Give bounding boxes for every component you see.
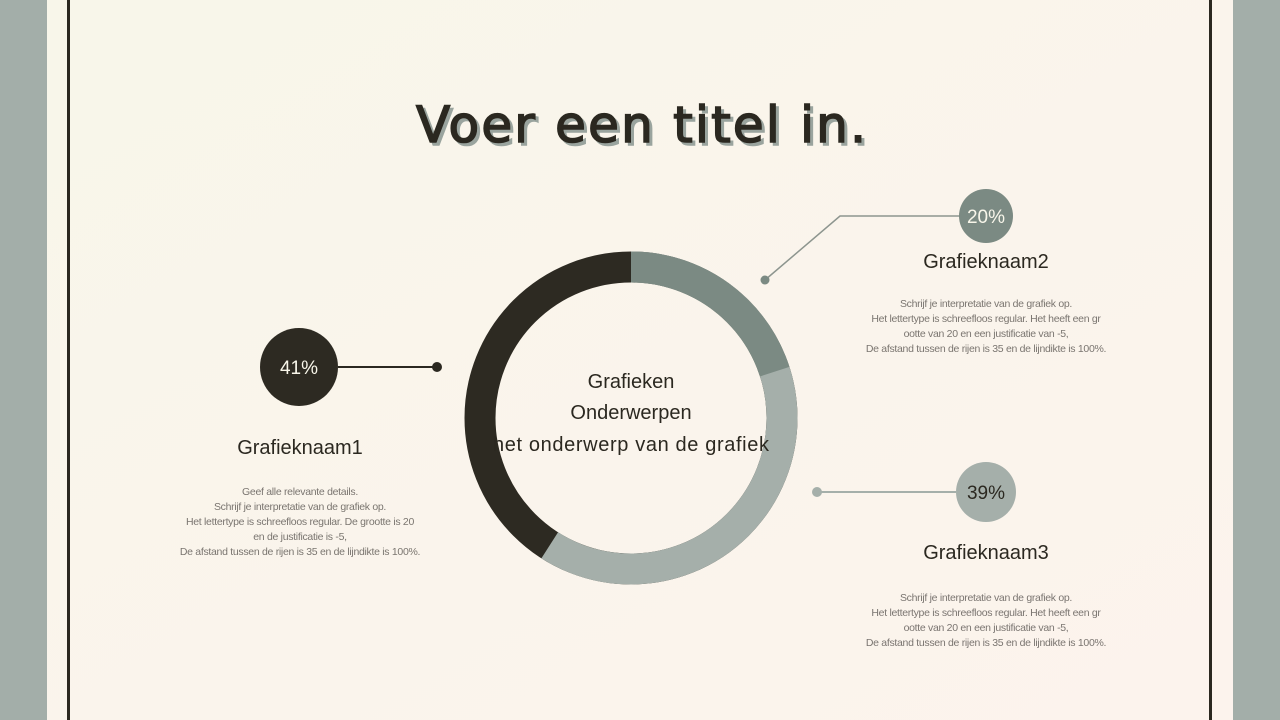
donut chart [480,267,782,569]
center text: het onderwerp van de grafiek [493,434,770,456]
callout 1: Het lettertype is schreefloos regular. De grootte is 20 [186,516,414,528]
callout 2: Grafieknaam2 [923,251,1049,273]
center text: Grafieken [588,371,674,393]
callout 3: De afstand tussen de rijen is 35 en de lijndikte is 100%. [866,637,1106,649]
callout 3: Grafieknaam3 [923,542,1049,564]
callout 2: Het lettertype is schreefloos regular. Het heeft een gr [871,313,1101,325]
callout 1: Grafieknaam1 [237,437,363,459]
callout 1: Schrijf je interpretatie van de grafiek op. [214,501,386,513]
callout 2 [760,189,1106,355]
callout 3: Schrijf je interpretatie van de grafiek op. [900,592,1072,604]
callout 2: Schrijf je interpretatie van de grafiek op. [900,298,1072,310]
center text: Onderwerpen [570,402,692,424]
callout 2: De afstand tussen de rijen is 35 en de lijndikte is 100%. [866,343,1106,355]
callout 3: ootte van 20 en een justificatie van -5, [904,622,1068,634]
callout 1: en de justificatie is -5, [253,531,347,543]
title: Voer een titel in. [416,96,866,154]
callout 3 [812,462,1106,649]
callout 3: 39% [967,483,1005,504]
callout 1: 41% [280,358,318,379]
center text [493,371,770,456]
title: Voer een titel in. [419,99,869,157]
callout 1 [180,328,442,558]
callout 1: Geef alle relevante details. [242,486,358,498]
callout 2: ootte van 20 en een justificatie van -5, [904,328,1068,340]
callout 3: Het lettertype is schreefloos regular. Het heeft een gr [871,607,1101,619]
callout 2: 20% [967,207,1005,228]
callout 1: De afstand tussen de rijen is 35 en de lijndikte is 100%. [180,546,420,558]
